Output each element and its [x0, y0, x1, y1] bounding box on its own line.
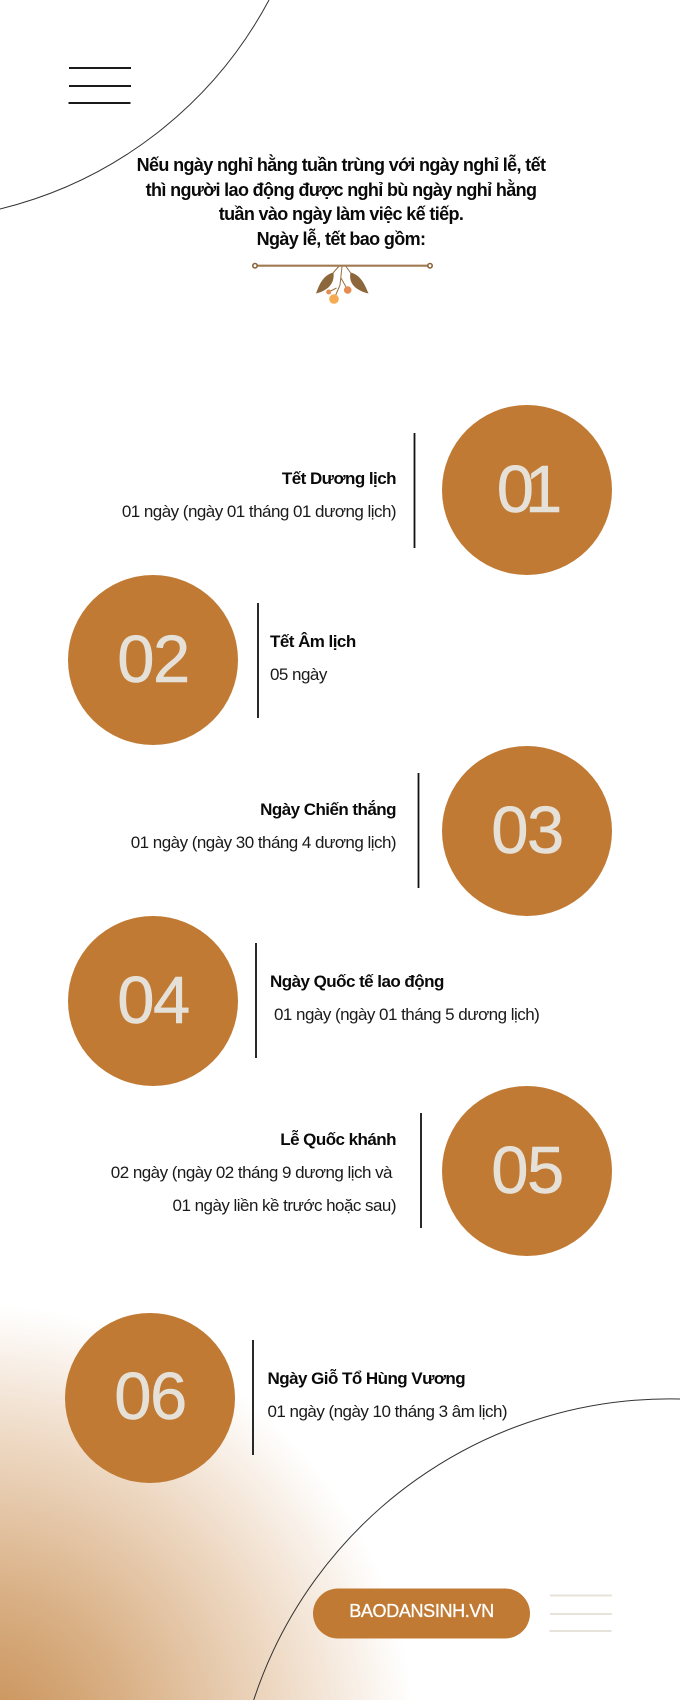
row 06: Ngày Giỗ Tổ Hùng Vương: [65, 1313, 507, 1483]
row 02: Tết Âm lịch: 05 ngày: [270, 665, 328, 684]
row 01: Tết Dương lịch: Tết Dương lịch: [282, 469, 396, 488]
row 01: Tết Dương lịch: [122, 405, 612, 575]
row 05: Lễ Quốc khánh: [111, 1086, 612, 1256]
background gradient: bottom left: [0, 1300, 420, 1700]
heading: Ngày lễ, tết bao gồm:: [257, 228, 425, 249]
row 03: Ngày Chiến thắng: [131, 746, 612, 916]
row 05: Lễ Quốc khánh: Lễ Quốc khánh: [280, 1130, 396, 1149]
row 05: Lễ Quốc khánh: 01 ngày liền kề trước hoặc sau): [173, 1196, 396, 1215]
decorative arc: top left: [0, 0, 269, 209]
row 06: Ngày Giỗ Tổ Hùng Vương: 06: [114, 1359, 186, 1434]
heading: Nếu ngày nghỉ hằng tuần trùng với ngày nghỉ lễ, tết: [137, 154, 546, 175]
heading: thì người lao động được nghỉ bù ngày nghỉ hằng: [146, 179, 536, 200]
icon: three lines top left: [68, 68, 131, 103]
row 04: Ngày Quốc tế lao động: 01 ngày (ngày 01 tháng 5 dương lịch): [274, 1005, 539, 1024]
row 05: Lễ Quốc khánh: 02 ngày (ngày 02 tháng 9 dương lịch và: [111, 1163, 393, 1182]
row 06: Ngày Giỗ Tổ Hùng Vương: Ngày Giỗ Tổ Hùng Vương: [268, 1369, 465, 1388]
row 04: Ngày Quốc tế lao động: Ngày Quốc tế lao động: [270, 972, 444, 991]
footer badge: BAODANSINH.VN: [313, 1588, 530, 1638]
heading: [137, 154, 546, 249]
row 06: Ngày Giỗ Tổ Hùng Vương: 01 ngày (ngày 10 tháng 3 âm lịch): [268, 1402, 507, 1421]
row 03: Ngày Chiến thắng: 01 ngày (ngày 30 tháng 4 dương lịch): [131, 833, 396, 852]
icon: three pale lines bottom right: [550, 1596, 612, 1631]
row 01: Tết Dương lịch: 01: [497, 452, 559, 527]
row 04: Ngày Quốc tế lao động: [68, 916, 539, 1086]
footer badge: BAODANSINH.VN: BAODANSINH.VN: [349, 1601, 494, 1621]
row 05: Lễ Quốc khánh: 05: [491, 1133, 563, 1208]
row 03: Ngày Chiến thắng: 03: [491, 793, 563, 868]
icon: branch ornament: [253, 264, 432, 304]
row 04: Ngày Quốc tế lao động: 04: [117, 963, 189, 1038]
decorative arc: bottom right: [254, 1399, 680, 1700]
row 02: Tết Âm lịch: 02: [117, 622, 189, 697]
row 02: Tết Âm lịch: Tết Âm lịch: [270, 632, 356, 651]
heading: tuần vào ngày làm việc kế tiếp.: [219, 204, 463, 224]
row 02: Tết Âm lịch: [68, 575, 356, 745]
row 01: Tết Dương lịch: 01 ngày (ngày 01 tháng 01 dương lịch): [122, 502, 396, 521]
row 03: Ngày Chiến thắng: Ngày Chiến thắng: [260, 800, 396, 819]
